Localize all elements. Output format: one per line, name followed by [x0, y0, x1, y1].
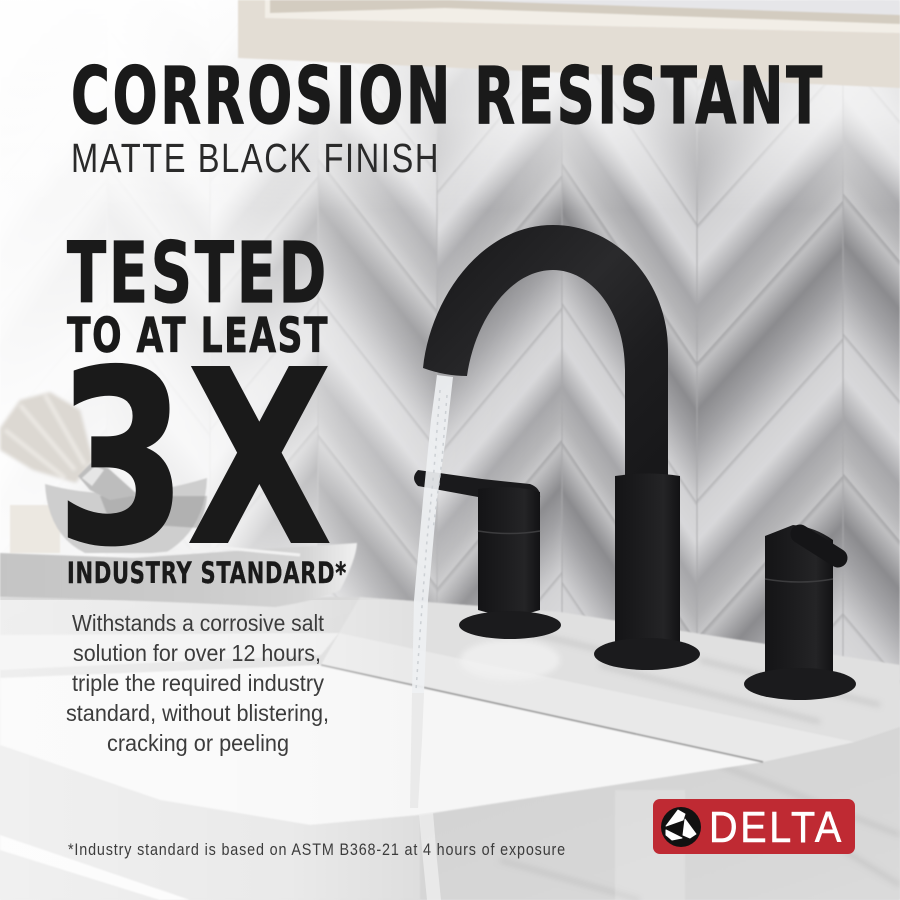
- soap dish: [0, 543, 357, 607]
- center base: [594, 638, 700, 670]
- right handle body: [765, 525, 833, 680]
- right handle lever: [800, 534, 838, 558]
- right base: [744, 668, 856, 700]
- subtitle: matte black finish: MATTE BLACK FINISH: [71, 135, 440, 181]
- body copy: standard, without blistering,: [66, 700, 329, 726]
- faucet: [414, 225, 856, 700]
- faucet reflections on counter: [460, 640, 560, 680]
- big number: 3X: 3X: [56, 319, 332, 599]
- left handle body: [478, 487, 540, 615]
- still life: shaving brush, bowl and soap dish: [0, 392, 357, 607]
- water stream: [410, 375, 453, 900]
- center column: [615, 474, 680, 648]
- body copy: solution for over 12 hours,: [73, 640, 321, 666]
- logo: Delta: DELTA: [709, 803, 844, 852]
- soap block: [10, 505, 60, 553]
- headline: tested: TESTED: [67, 224, 329, 322]
- shaving brush: [0, 392, 93, 483]
- headline: to at least: TO AT LEAST: [67, 308, 329, 364]
- shaving bowl: [45, 478, 207, 553]
- body copy: cracking or peeling: [107, 730, 289, 756]
- body copy: Withstands a corrosive salt: [72, 610, 324, 636]
- spout: [423, 225, 668, 480]
- footnote: *Industry standard is based on ASTM B368-21 at 4 hours of exposure: [68, 840, 566, 859]
- left handle lever: [414, 470, 540, 498]
- left base: [459, 611, 561, 639]
- body copy: triple the required industry: [72, 670, 324, 696]
- lower left light wash: [0, 600, 420, 900]
- sink basin: [0, 633, 763, 900]
- label: industry standard: INDUSTRY STANDARD*: [67, 556, 347, 590]
- logo: Delta: [653, 799, 855, 854]
- body copy: [66, 610, 329, 756]
- mirror frame: [238, 0, 900, 88]
- marble countertop: [0, 597, 900, 900]
